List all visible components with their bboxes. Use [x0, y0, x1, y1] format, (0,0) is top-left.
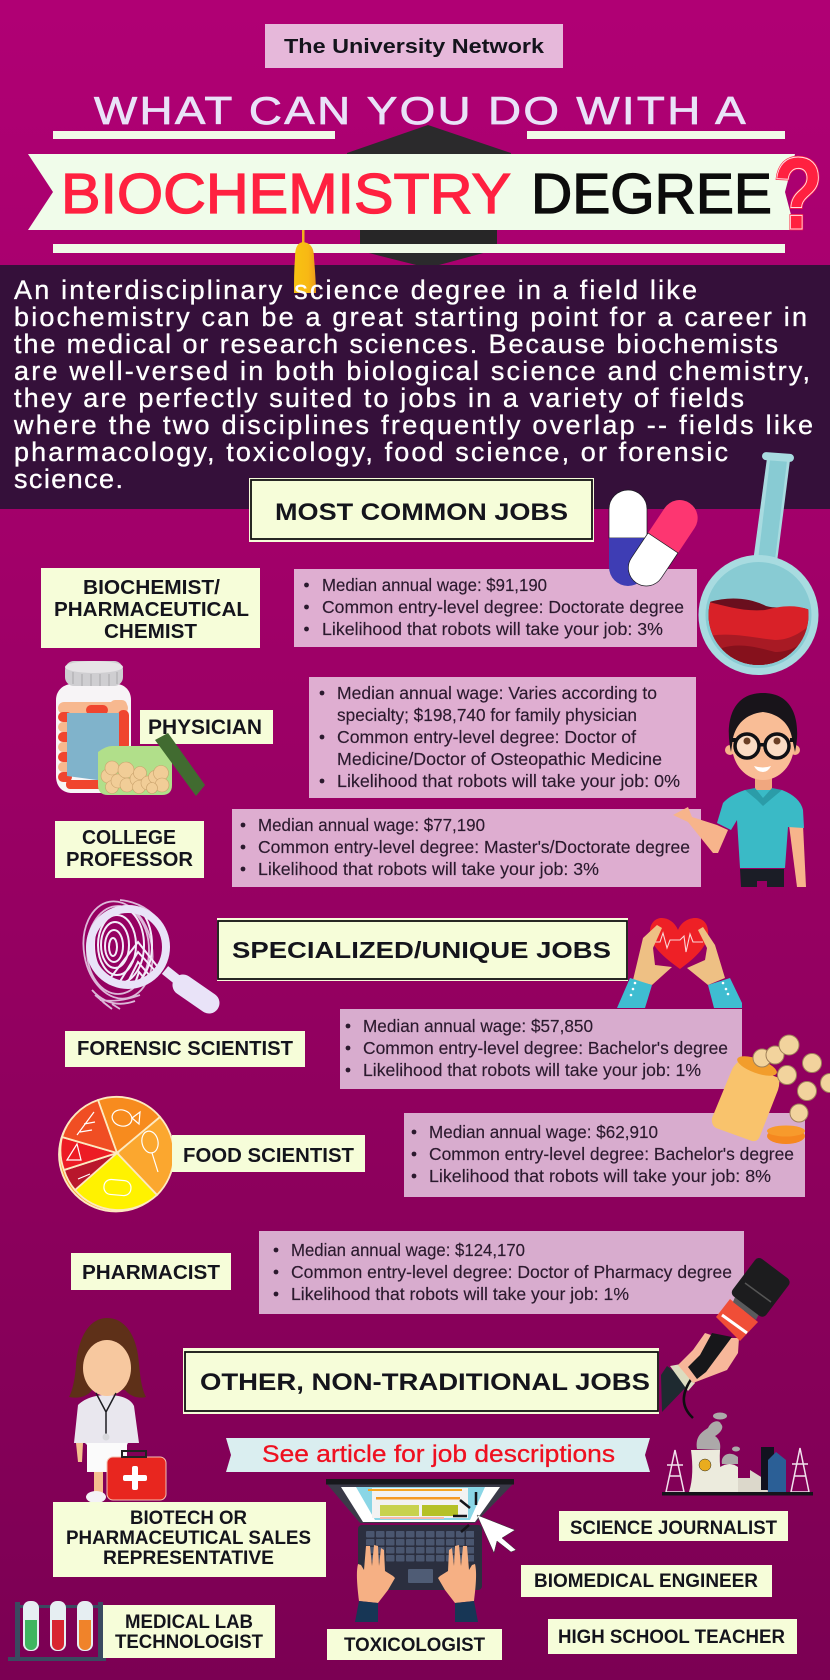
label: biomedical engineer: BIOMEDICAL ENGINEER [534, 1571, 758, 1592]
label: biotech sales: REPRESENTATIVE [103, 1547, 274, 1569]
info: biochemist: Median annual wage: $91,190 [322, 575, 547, 595]
label: biomedical engineer [521, 1565, 772, 1597]
info: pharmacist: Median annual wage: $124,170 [291, 1240, 525, 1260]
label: high school teacher: HIGH SCHOOL TEACHER [558, 1627, 785, 1648]
label: toxicologist [327, 1629, 502, 1660]
info: food scientist: Likelihood that robots will take your job: 8% [429, 1166, 771, 1186]
info: food scientist [404, 1113, 805, 1197]
label: high school teacher [548, 1619, 797, 1654]
info: physician: Likelihood that robots will take your job: 0% [337, 771, 680, 791]
heading: most common jobs [249, 478, 594, 542]
info: physician: Common entry-level degree: Doctor of [337, 727, 636, 747]
title line: WHAT CAN YOU DO WITH A [94, 90, 748, 133]
intro paragraph [13, 275, 813, 494]
label: science journalist [559, 1511, 788, 1541]
heading: specialized jobs: SPECIALIZED/UNIQUE JOBS [232, 937, 611, 963]
label: science journalist: SCIENCE JOURNALIST [570, 1518, 777, 1539]
intro paragraph: science. [14, 464, 123, 494]
label: toxicologist: TOXICOLOGIST [344, 1635, 485, 1656]
intro paragraph: they are perfectly suited to jobs in a variety of fields [14, 383, 744, 413]
info: forensic scientist: Median annual wage: $57,850 [363, 1016, 593, 1036]
info: biochemist: Common entry-level degree: Doctorate degree [322, 597, 684, 617]
label: biotech sales: PHARMACEUTICAL SALES [66, 1527, 311, 1549]
info: physician: specialty; $198,740 for family physician [337, 705, 637, 725]
label: food scientist: FOOD SCIENTIST [183, 1144, 354, 1167]
info: forensic scientist [340, 1009, 742, 1089]
icon: tassel [294, 230, 316, 293]
info: physician: Medicine/Doctor of Osteopathic Medicine [337, 749, 662, 769]
info: college professor: Common entry-level degree: Master's/Doctorate degree [258, 837, 690, 857]
icon: power plant and city [662, 1412, 813, 1496]
intro paragraph: where the two disciplines frequently overlap -- fields like [13, 410, 813, 440]
info: forensic scientist: Likelihood that robots will take your job: 1% [363, 1060, 701, 1080]
info: forensic scientist: Common entry-level degree: Bachelor's degree [363, 1038, 728, 1058]
info: college professor: Median annual wage: $77,190 [258, 815, 485, 835]
label: forensic scientist: FORENSIC SCIENTIST [77, 1037, 293, 1060]
icon: round flask [698, 452, 818, 675]
label: college professor: COLLEGE [82, 826, 176, 849]
graduation cap [347, 125, 511, 268]
icon: man with glasses [673, 693, 806, 887]
title banner [28, 154, 795, 230]
label: college professor: PROFESSOR [66, 848, 193, 871]
ribbon: see article: See article for job descriptions [262, 1441, 615, 1468]
label: food scientist [172, 1135, 365, 1172]
icon: test tubes [8, 1601, 106, 1661]
label: medical lab technologist: TECHNOLOGIST [115, 1631, 263, 1653]
label: physician: PHYSICIAN [148, 716, 262, 739]
icon: nurse [69, 1318, 166, 1503]
intro paragraph: the medical or research sciences. Because biochemists [14, 329, 778, 359]
info: food scientist: Common entry-level degree: Bachelor's degree [429, 1144, 794, 1164]
intro paragraph: biochemistry can be a great starting point for a career in [14, 302, 807, 332]
info: pharmacist: Common entry-level degree: Doctor of Pharmacy degree [291, 1262, 732, 1282]
icon: question mark: ? [773, 136, 823, 251]
icon: laptop with hands [326, 1479, 516, 1622]
icon: capsules [609, 490, 705, 593]
info: biochemist: Likelihood that robots will take your job: 3% [322, 619, 663, 639]
label: pharmacist [71, 1253, 231, 1290]
icon: question mark: ? [773, 136, 823, 251]
title rules [53, 131, 785, 253]
info: college professor: Likelihood that robots will take your job: 3% [258, 859, 599, 879]
brand label [265, 24, 563, 68]
dark intro band [0, 265, 830, 509]
label: biochemist: CHEMIST [104, 620, 197, 643]
info: physician: Median annual wage: Varies according to [337, 683, 657, 703]
heading: specialized jobs [217, 918, 628, 981]
ribbon: see article [226, 1438, 650, 1472]
label: medical lab technologist [103, 1605, 275, 1658]
label: pharmacist: PHARMACIST [82, 1261, 220, 1284]
title banner: DEGREE [531, 162, 772, 226]
info: biochemist [294, 569, 697, 647]
label: physician [140, 710, 273, 744]
icon: spilled pill bottle [712, 1035, 830, 1144]
label: biochemist [41, 568, 260, 648]
info: food scientist: Median annual wage: $62,910 [429, 1122, 658, 1142]
info: physician [309, 677, 696, 798]
label: biochemist: PHARMACEUTICAL [54, 598, 249, 621]
heading: other jobs: OTHER, NON-TRADITIONAL JOBS [200, 1369, 650, 1396]
heading: most common jobs: MOST COMMON JOBS [275, 499, 568, 526]
label: college professor [55, 821, 204, 878]
icon: hand holding microphone [661, 1256, 792, 1418]
label: biotech sales [53, 1502, 326, 1577]
intro paragraph: An interdisciplinary science degree in a field like [14, 275, 697, 305]
info: pharmacist [259, 1231, 744, 1314]
heading: other jobs [183, 1348, 659, 1414]
label: biotech sales: BIOTECH OR [130, 1507, 247, 1529]
intro paragraph: pharmacology, toxicology, food science, or forensic [14, 437, 728, 467]
intro paragraph: are well-versed in both biological science and chemistry, [14, 356, 810, 386]
label: biochemist: BIOCHEMIST/ [83, 576, 220, 599]
label: medical lab technologist: MEDICAL LAB [125, 1611, 253, 1633]
brand label: The University Network [284, 36, 545, 58]
info: pharmacist: Likelihood that robots will take your job: 1% [291, 1284, 629, 1304]
icon: hands holding heart [617, 918, 742, 1008]
icon: pill bottle and jar [56, 661, 172, 795]
info: college professor [232, 809, 701, 887]
icon: magnifier over fingerprint [76, 896, 209, 1009]
icon: food pie chart [59, 1097, 174, 1212]
icon: jar lid [155, 733, 205, 796]
label: forensic scientist [65, 1031, 305, 1067]
title banner: BIOCHEMISTRY [61, 162, 511, 226]
